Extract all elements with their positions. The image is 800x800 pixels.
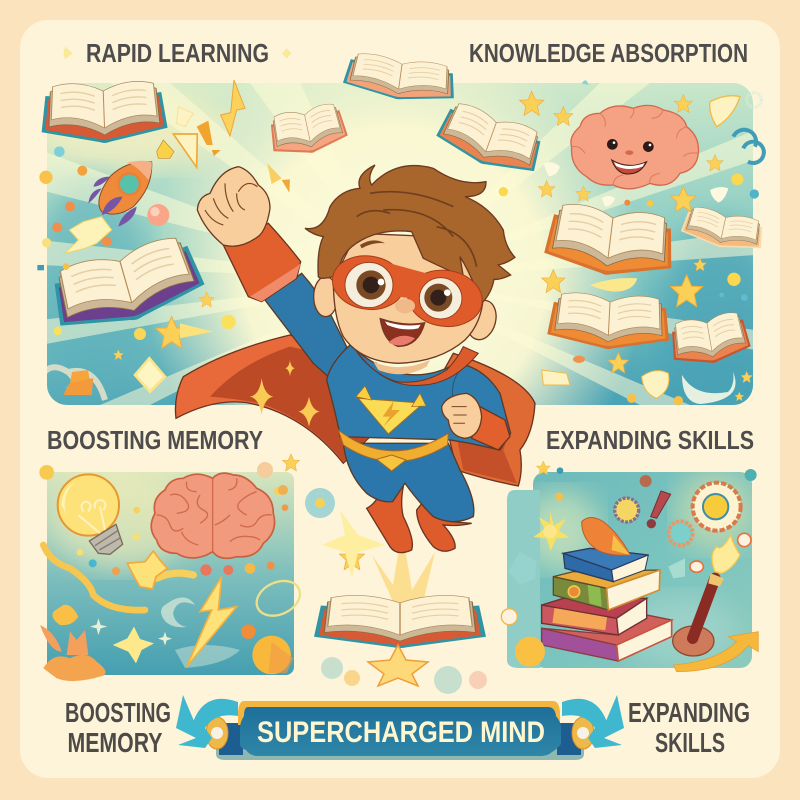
lower hand [442,393,510,450]
mouth [380,318,425,347]
swirl bottom-left [40,367,105,400]
superhero boy [175,165,535,553]
hair [305,165,515,303]
sleeve cuff highlight [250,263,301,302]
left ring [206,717,228,749]
right arrow [562,695,624,748]
books: top area [40,51,767,370]
icon: brain [151,473,275,558]
icon: light bulb [39,465,123,554]
banner gold edge [238,701,560,725]
heading: rapid learning: RAPID LEARNING [86,38,269,68]
ribbon tail left [219,723,243,755]
right ring [572,717,594,749]
raised fist [197,167,270,246]
icon: gears, wand and arrow [501,461,758,672]
nose [395,299,415,313]
shoulder line [452,370,460,400]
torso [327,345,511,450]
goggle mask [329,251,408,314]
banner lower lip [216,735,584,760]
raised arm [265,273,347,377]
floating triangles [173,134,197,167]
decorations: top-left scene [37,47,292,395]
panel: boosting memory scene background [47,470,294,675]
left arrow [176,695,238,748]
label: expanding skills bottom: EXPANDING [628,697,750,728]
balls [147,204,169,226]
swirl bottom-right [682,372,736,404]
banner: supercharged mind [206,701,594,760]
panel: top scene background [47,83,753,405]
belt [338,430,448,462]
panel: expanding skills scene background [520,470,755,668]
brow [360,240,385,248]
central light burst [47,83,753,405]
collar [353,347,478,385]
neck [373,360,430,374]
belt buckle [377,455,406,471]
icon: glowing open book [314,530,487,694]
icon: stack of books [542,517,672,661]
fire bottom-left [68,370,92,395]
sparkles: middle strip [257,454,385,578]
banner title: SUPERCHARGED MIND [257,716,545,749]
head [305,165,515,363]
panel: expanding skills left extension [507,490,540,668]
icon: rocket [88,161,152,227]
decorations: boosting memory scene [40,487,306,681]
cape [175,335,535,486]
banner plate [240,707,561,756]
rocket flame [65,217,112,253]
sleeve [223,223,301,302]
ribbon tail right [557,723,581,755]
icon: smiling brain [571,105,698,189]
heading: boosting memory: BOOSTING MEMORY [47,425,263,455]
chest emblem [356,386,426,434]
label: boosting memory bottom: BOOSTING [65,697,171,728]
label: expanding skills bottom: SKILLS [655,727,725,758]
decorations: top-right scene [499,80,764,405]
label: boosting memory bottom: MEMORY [68,727,163,758]
heading: expanding skills: EXPANDING SKILLS [546,425,754,455]
legs [343,443,474,553]
